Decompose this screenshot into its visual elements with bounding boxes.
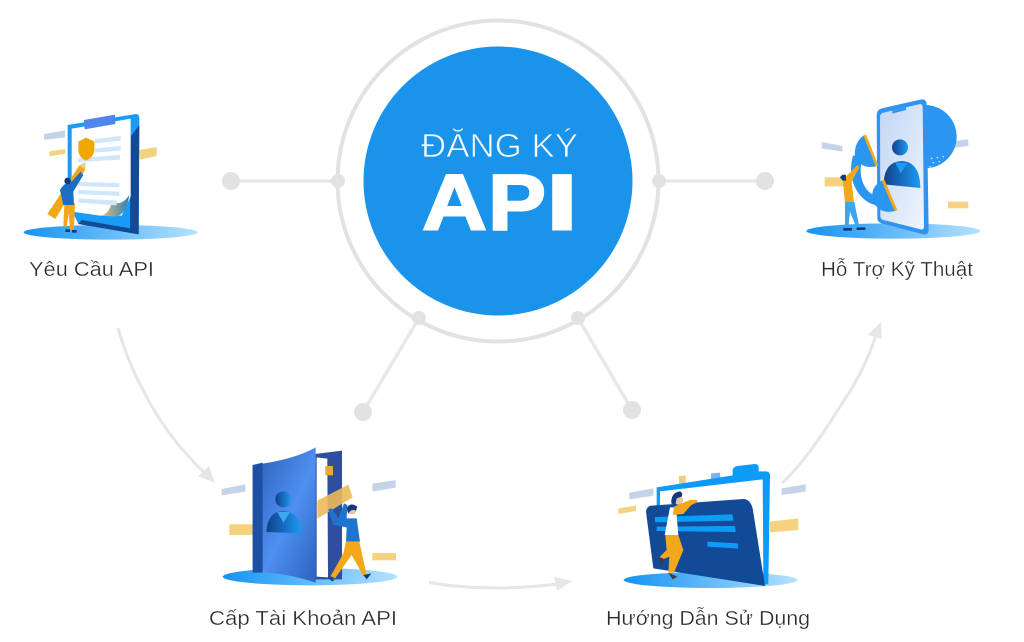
heading: API: P [488,158,546,246]
icon: folder guide illustration [618,464,806,588]
connector: bottom left [354,311,426,421]
heading: Đăng ký: ĐĂNG KÝ [421,127,578,164]
arrow: account to guide [429,577,572,591]
icon: account door illustration [222,447,397,585]
heading: API [422,158,578,246]
central circle [364,46,632,316]
outer ring [338,20,658,342]
connector: left [222,172,345,190]
label: Yêu Cầu API: Yêu Cầu API [29,259,154,281]
heading: API: A [422,158,487,246]
label: Cấp Tài Khoản API: Cấp Tài Khoản API [209,608,397,630]
arrow: request to account [118,328,215,483]
label: Hướng Dẫn Sử Dụng: Hướng Dẫn Sử Dụng [606,607,810,630]
heading: API: I [546,158,578,246]
icon: phone support illustration [806,99,980,239]
connector: bottom right [571,311,641,419]
icon: clipboard illustration [24,114,198,240]
connector: right [652,172,774,190]
arrow: guide to support [782,322,882,483]
label: Hỗ Trợ Kỹ Thuật: Hỗ Trợ Kỹ Thuật [821,258,973,281]
